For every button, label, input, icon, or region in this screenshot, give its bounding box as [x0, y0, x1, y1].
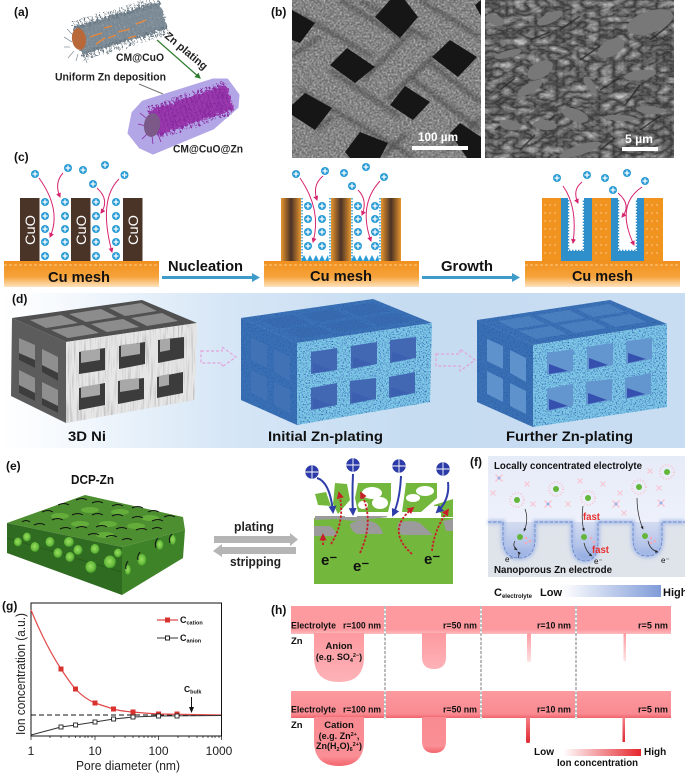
row: cation: r=5 nm	[638, 704, 668, 716]
row: cation: 2+	[351, 732, 357, 738]
row: cation: ,	[357, 731, 359, 741]
caption: Further Zn-plating: Further Zn-plating	[506, 428, 633, 444]
pointer line	[139, 84, 163, 94]
plot: Ion concentration (a.u.)	[13, 613, 28, 735]
row: anion: )	[359, 652, 362, 662]
row: anion: Electrolyte	[291, 620, 336, 632]
row: cation: O)	[340, 741, 350, 751]
rod: CM@CuO	[64, 15, 164, 63]
stage 2: Zn nucleation: Cu mesh	[310, 268, 372, 285]
electrode diagram: e⁻	[661, 556, 670, 565]
label b: (b)	[271, 5, 286, 19]
row: cation	[291, 691, 671, 766]
row: anion: 4	[350, 658, 354, 664]
label h: (h)	[271, 603, 286, 617]
electrode diagram: fast	[583, 512, 601, 523]
cross-section with ion and electron flow: e⁻	[353, 558, 369, 575]
arrow: Nucleation	[162, 258, 260, 282]
box: Initial Zn-plating	[241, 299, 432, 425]
arrow: Nucleation: Nucleation	[168, 258, 243, 275]
plot: 100	[148, 744, 169, 758]
panel: (h) pore-size ion concentration	[271, 603, 671, 769]
plot: 1000	[206, 744, 233, 758]
cross-section with ion and electron flow: e⁻	[424, 551, 440, 568]
scale bar: 5 µm: 5 µm	[625, 132, 653, 146]
row: anion: 2−	[353, 653, 359, 659]
plot: C	[180, 633, 186, 643]
row: cation: r=10 nm	[537, 704, 571, 716]
text: Zn plating: Zn plating	[162, 30, 210, 73]
legend: ion concentration: Ion concentration	[557, 758, 638, 769]
caption: Initial Zn-plating: Initial Zn-plating	[268, 428, 383, 444]
electrode diagram: e⁻	[505, 555, 514, 564]
electrode diagram	[488, 456, 685, 577]
pore dividers	[385, 606, 576, 719]
SEM image: flakes at 5 µm	[484, 0, 676, 162]
row: cation: r=50 nm	[443, 704, 477, 716]
legend: ion concentration	[534, 747, 666, 769]
scale bar: 5 µm	[622, 132, 658, 151]
panel: (b) SEM images	[271, 0, 676, 162]
legend: C electrolyte	[494, 585, 685, 600]
row: anion: (e.g. SO	[316, 652, 350, 662]
plot: bulk	[190, 690, 202, 696]
row: cation: )	[359, 741, 362, 751]
electrode diagram: fast	[592, 545, 610, 556]
arrow: Zn plating	[157, 40, 200, 78]
plot: anion	[186, 638, 202, 644]
label: plating: plating	[234, 520, 274, 534]
row: cation: 2+	[353, 742, 359, 748]
row: anion: Anion	[326, 641, 353, 652]
row: cation: Zn(H	[316, 741, 337, 751]
text: Uniform Zn deposition: Uniform Zn deposition	[55, 72, 166, 84]
plot: 10	[88, 744, 102, 758]
plot: cation	[186, 620, 203, 626]
legend: ion concentration: Low	[534, 747, 554, 758]
dashed arrow 2	[436, 349, 475, 371]
heading DCP-Zn: DCP-Zn	[71, 473, 114, 487]
cross-section with ion and electron flow	[305, 458, 453, 584]
plot: Pore diameter (nm)	[76, 758, 180, 773]
dashed arrow 1	[201, 347, 236, 367]
box: 3D Ni	[11, 300, 197, 423]
cross-section with ion and electron flow: e⁻	[321, 552, 337, 569]
stage 1: CuO pillars on Cu mesh: CuO	[22, 215, 38, 245]
box: Further Zn-plating	[477, 300, 667, 427]
row: cation: Cation	[324, 720, 354, 731]
rod: CM@CuO@Zn	[129, 80, 238, 153]
label c: (c)	[14, 150, 29, 164]
caption: 3D Ni: 3D Ni	[68, 428, 106, 444]
label: stripping: stripping	[230, 555, 281, 569]
electrode diagram: Locally concentrated electrolyte	[494, 460, 642, 472]
panel: (a) Zn plating on CM@CuO	[14, 5, 243, 156]
legend: C electrolyte: Low	[540, 587, 562, 599]
panel background	[0, 293, 685, 448]
arrow: plating	[214, 533, 298, 546]
panel: (f) nanoporous Zn electrode	[470, 455, 685, 600]
plot: 1	[28, 744, 35, 758]
porous green slab	[7, 495, 185, 595]
panel: (d) 3D Ni plating	[0, 292, 685, 448]
plot: C	[180, 615, 186, 625]
row: cation: 6	[350, 747, 353, 753]
arrow: stripping	[213, 544, 296, 557]
stage 3: Zn growth	[525, 169, 680, 287]
row: anion	[291, 606, 671, 682]
electrode diagram: Nanoporous Zn electrode	[494, 564, 612, 576]
stage 3: Zn growth: Cu mesh	[572, 268, 633, 285]
stage 2: Zn nucleation	[264, 163, 419, 287]
text: CM@CuO: CM@CuO	[116, 52, 164, 64]
row: cation: r=100 nm	[343, 704, 381, 716]
panel: (e) DCP-Zn	[6, 458, 453, 595]
label f: (f)	[470, 455, 482, 469]
row: cation: 2	[337, 747, 340, 753]
legend: C electrolyte: C	[494, 587, 502, 599]
panel: (c) nucleation and growth schematic	[4, 150, 680, 287]
stage 1: CuO pillars on Cu mesh: CuO	[125, 215, 141, 245]
label d: (d)	[12, 292, 27, 306]
plot	[13, 603, 233, 773]
scale bar: 100 µm	[412, 130, 468, 150]
arrow: Growth	[422, 258, 520, 282]
label g: (g)	[2, 599, 17, 613]
row: anion: r=50 nm	[443, 620, 477, 632]
row: cation: Electrolyte	[291, 704, 336, 716]
arrow: Growth: Growth	[441, 258, 493, 275]
row: anion: Zn	[291, 636, 303, 647]
row: anion: r=5 nm	[638, 620, 668, 632]
row: anion: r=100 nm	[343, 620, 381, 632]
panel: (g) ion concentration chart	[2, 599, 233, 773]
text: CM@CuO@Zn: CM@CuO@Zn	[173, 144, 243, 156]
plot: C	[184, 684, 190, 694]
stage 1: CuO pillars on Cu mesh	[4, 161, 159, 287]
stage 1: CuO pillars on Cu mesh: CuO	[73, 215, 89, 245]
scale bar: 100 µm: 100 µm	[418, 130, 458, 144]
electrode diagram: e⁻	[594, 557, 603, 566]
stage 1: CuO pillars on Cu mesh: Cu mesh	[48, 269, 110, 286]
legend: ion concentration: High	[644, 747, 666, 758]
row: cation: (e.g. Zn	[319, 731, 351, 741]
SEM image: mesh at 100 µm	[292, 0, 482, 158]
legend: C electrolyte: electrolyte	[502, 594, 533, 600]
row: cation: Zn	[291, 720, 303, 731]
label a: (a)	[14, 5, 29, 19]
label e: (e)	[6, 459, 21, 473]
row: anion: r=10 nm	[537, 620, 571, 632]
